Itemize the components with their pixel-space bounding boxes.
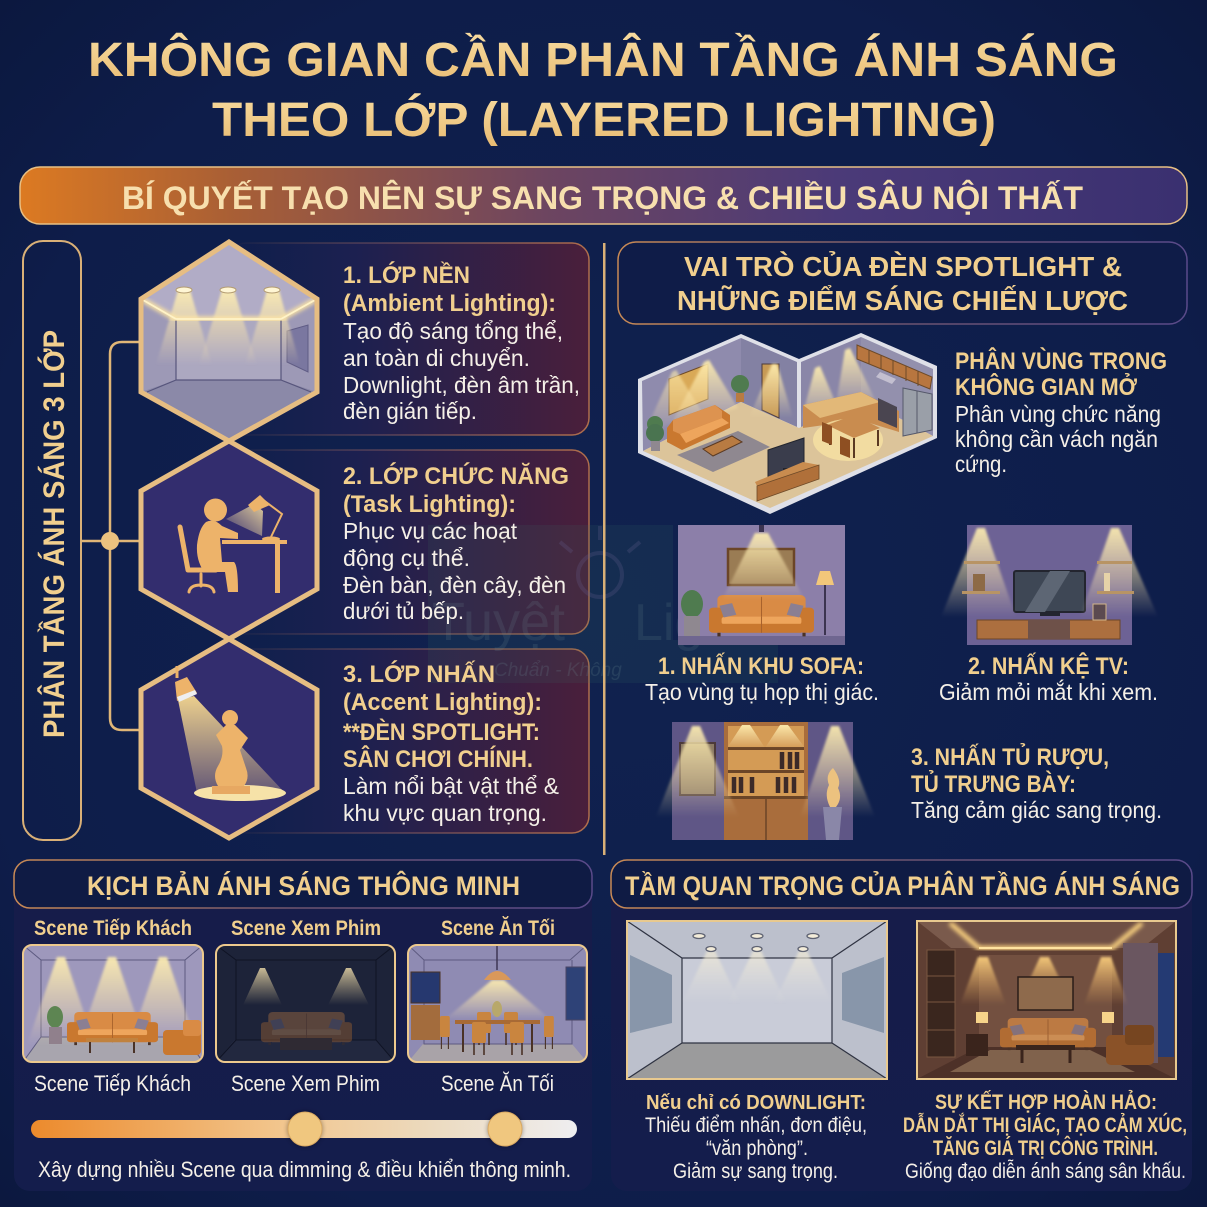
text: layer 2 task: 2. LỚP CHỨC NĂNG [343,462,569,490]
text: cabinet accent caption: TỦ TRƯNG BÀY: [911,769,1076,798]
text: layer 1 ambient: (Ambient Lighting): [343,290,556,317]
text: open space zoning: KHÔNG GIAN MỞ [955,372,1137,401]
panel: smart lighting scenes [14,860,592,1191]
card: task background [229,450,589,634]
card: accent background [229,649,589,833]
text: downlight only [645,1092,867,1183]
heading: importance [611,860,1192,908]
thumbnail: downlight only room [627,921,887,1079]
text: open space zoning: cứng. [955,451,1007,477]
text: layer 1 ambient: đèn gián tiếp. [343,398,477,424]
text: open space zoning: PHÂN VÙNG TRONG [955,347,1167,375]
title: THEO LỚP (LAYERED LIGHTING) [212,92,996,147]
thumbnail: layered luxury room [917,921,1176,1079]
dimmer slider [31,1111,577,1147]
text: layer 2 task: Phục vụ các hoạt [343,518,518,544]
connector tree [81,342,141,730]
thumbnail: guest scene [23,945,203,1062]
text: layer 3 accent: 3. LỚP NHẤN [343,660,495,688]
watermark: Lights [634,594,773,652]
text: downlight only: “văn phòng”. [706,1137,808,1160]
thumbnail: dinner scene [408,945,587,1062]
text: layer 1 ambient [343,261,580,424]
text: downlight only: Nếu chỉ có DOWNLIGHT: [646,1092,866,1114]
heading: smart scenes: KỊCH BẢN ÁNH SÁNG THÔNG MINH [87,869,520,901]
text: layer 3 accent: Làm nổi bật vật thể & [343,773,559,799]
text: layer 3 accent: **ĐÈN SPOTLIGHT: [343,718,540,746]
panel: importance of layered lighting [611,860,1192,1191]
vertical label: three layer lighting: PHÂN TẦNG ÁNH SÁNG 3 LỚP [37,330,71,738]
text: open space zoning: Phân vùng chức năng [955,401,1161,427]
scene titles: Scene Xem Phim [231,917,381,940]
column divider [603,243,606,855]
text: sofa accent caption [645,652,879,705]
text: TV accent caption [939,652,1158,705]
scene titles [34,917,555,940]
heading: spotlight role: NHỮNG ĐIỂM SÁNG CHIẾN LƯỢC [677,285,1128,316]
text: cabinet accent caption: Tăng cảm giác sang trọng. [911,797,1162,823]
text: cabinet accent caption: 3. NHẤN TỦ RƯỢU, [911,742,1109,771]
text: perfect combination [903,1091,1187,1183]
title: KHÔNG GIAN CẦN PHÂN TẦNG ÁNH SÁNG [88,32,1118,87]
scene captions: Scene Ăn Tối [441,1071,554,1096]
illustration: wine cabinet accent [656,722,875,840]
title [88,32,1118,147]
text: sofa accent caption: 1. NHẤN KHU SOFA: [658,652,864,680]
illustration: isometric open-plan room [638,333,937,514]
icon: task lighting hexagon [141,441,317,639]
text: layer 2 task: động cụ thể. [343,545,470,571]
scene captions: Scene Tiếp Khách [34,1071,191,1096]
text: TV accent caption: 2. NHẤN KỆ TV: [968,652,1129,680]
icon: accent lighting hexagon [141,639,317,838]
text: layer 3 accent: (Accent Lighting): [343,689,542,716]
illustration: TV accent [941,525,1158,645]
text: TV accent caption: Giảm mỏi mắt khi xem. [939,679,1158,705]
text: sofa accent caption: Tạo vùng tụ họp thị giác. [645,679,879,705]
icon: ambient lighting hexagon [141,242,317,441]
heading: spotlight role: VAI TRÒ CỦA ĐÈN SPOTLIGHT & [684,250,1122,282]
text: perfect combination: SỰ KẾT HỢP HOÀN HẢO: [935,1091,1157,1114]
text: downlight only: Thiếu điểm nhấn, đơn điệu, [645,1114,867,1137]
text: open space zoning: không cần vách ngăn [955,426,1158,452]
text: layer 1 ambient: an toàn di chuyển. [343,345,530,371]
illustration: sofa accent [678,525,845,645]
text: layer 2 task [343,462,569,624]
text: layer 2 task: (Task Lighting): [343,491,516,518]
vertical label: three layer lighting [23,241,81,840]
text: layer 1 ambient: Downlight, đèn âm trần, [343,372,580,398]
heading: spotlight role [618,242,1187,324]
scene titles: Scene Ăn Tối [441,917,555,940]
scene captions [34,1071,554,1096]
panel: layer cards [229,243,589,833]
watermark [428,525,778,683]
heading: smart scenes [14,860,592,908]
card: ambient background [229,243,589,435]
watermark: Tuyệt [432,592,565,652]
text: layer 1 ambient: Tạo độ sáng tổng thể, [343,318,563,344]
text: layer 2 task: Đèn bàn, đèn cây, đèn [343,572,566,598]
slider caption: Xây dựng nhiều Scene qua dimming & điều khiển thông minh. [38,1157,571,1182]
text: layer 1 ambient: 1. LỚP NỀN [343,261,470,289]
scene titles: Scene Tiếp Khách [34,917,192,940]
subtitle banner: BÍ QUYẾT TẠO NÊN SỰ SANG TRỌNG & CHIỀU SÂU NỘI THẤT [122,180,1083,216]
subtitle banner [20,167,1187,224]
text: downlight only: Giảm sự sang trọng. [673,1160,838,1183]
text: layer 3 accent [343,660,559,826]
text: layer 3 accent: khu vực quan trọng. [343,800,547,826]
watermark: Chuẩn - Không [494,660,622,681]
text: open space zoning [955,347,1167,477]
thumbnail: movie scene [216,945,395,1062]
text: layer 3 accent: SÂN CHƠI CHÍNH. [343,745,533,773]
text: layer 2 task: dưới tủ bếp. [343,598,464,624]
text: cabinet accent caption [911,742,1162,823]
scene captions: Scene Xem Phim [231,1071,380,1096]
